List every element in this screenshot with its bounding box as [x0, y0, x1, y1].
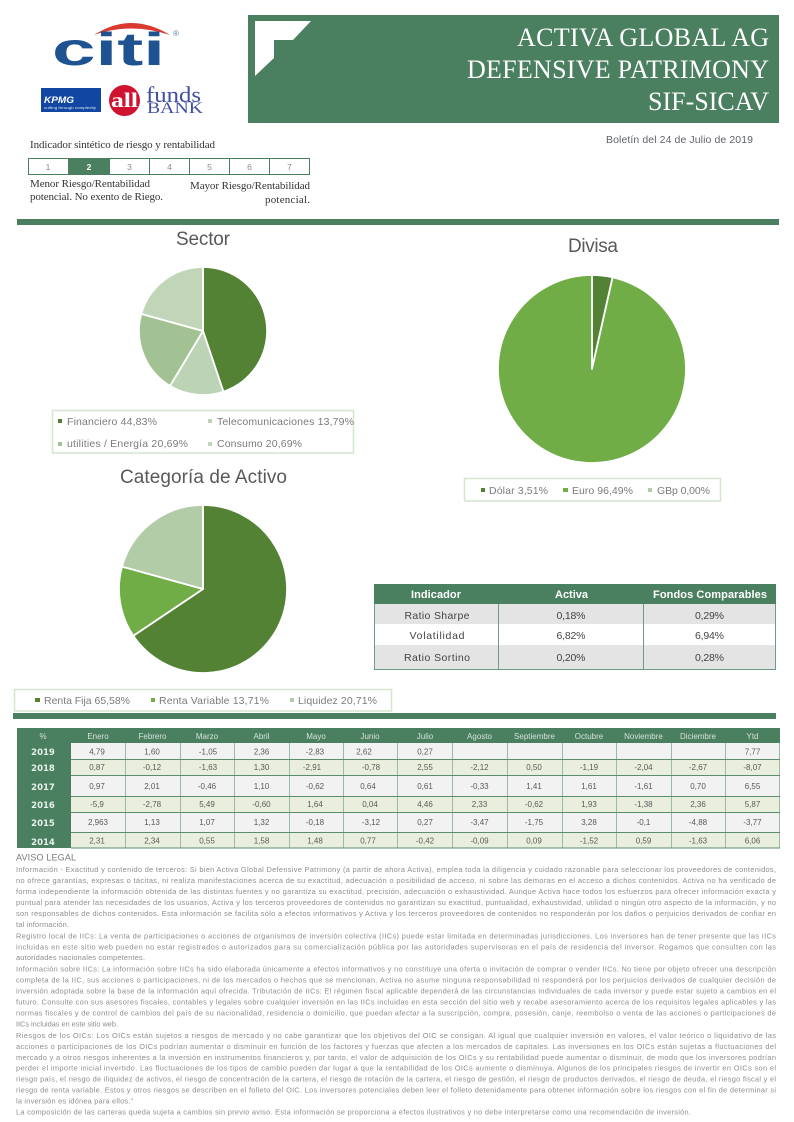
row: volatilidad	[410, 630, 724, 642]
title: DEFENSIVE PATRIMONY	[467, 55, 769, 84]
row 2016: 1,93	[581, 800, 597, 809]
legal text: puntual para atender las necesidades de los usuarios, Activa y los terceros proveedores de contenidos no garantizan su exactitud, puntualidad, exhaustividad, utilidad o ningún otro aspecto de la información, y no	[16, 898, 776, 907]
row 2019: 2,36	[254, 748, 270, 756]
row 2014	[31, 836, 761, 848]
row: ratio sortino	[404, 652, 724, 664]
row 2015: -3,12	[362, 818, 381, 827]
row 2016: -1,38	[634, 800, 653, 809]
legal text: forma independiente la información obtenida de las distintas fuentes y no garantiza su exactitud, precisión, adecuación o exhaustividad. Aunque Activa hace todos los esfuerzos para ofrecer información exacta y	[16, 887, 776, 896]
row 2018: -1,63	[199, 763, 218, 772]
row 2017	[31, 782, 761, 793]
panel: sector chart	[52, 229, 354, 453]
icon: white corner logo	[255, 21, 311, 76]
row 2016: 2,36	[690, 800, 706, 809]
row: volatilidad: 6,94%	[695, 630, 724, 642]
legal text: completa de la IIC, sus acciones o participaciones, ni de los mercados o hechos que se mencionan. Activa no asume ninguna responsabilidad ni responderá por los perjuicios derivados de cualquier decisión de	[16, 976, 776, 984]
row 2015: -0,18	[306, 818, 325, 827]
row 2019: 2,62	[356, 748, 372, 756]
legal text: Registro local de IICs: La venta de participaciones o acciones de organismos de inversión colectiva (IICs) puede estar limitada en determinadas jurisdicciones. Los inversores han de tener presente que las IICs	[16, 932, 776, 940]
risk indicator	[28, 139, 310, 206]
row 2018: 0,87	[89, 763, 105, 772]
sector legend	[52, 410, 354, 453]
table header: Mayo	[306, 732, 326, 741]
divisa legend: GBp 0,00%	[657, 485, 710, 497]
row 2018: 2018	[31, 764, 55, 774]
table header: Diciembre	[680, 732, 717, 741]
row 2014: 1,48	[307, 836, 323, 846]
categoria legend: Liquidez 20,71%	[298, 695, 377, 707]
legal text: acciones o participaciones de los OICs podrían aumentar o disminuir en función de los factores y fuerzas que afecten a los mercados de capitales. Las inversiones en los OICs están sujetas a fluctuaciones del	[16, 1042, 776, 1051]
legal text: normas fiscales y de control de cambios del país de su nacionalidad, residencia o domicilio, que puedan afectar a la suscripción, compra, posesión, canje, reembolso o venta de las acciones o participaciones de	[16, 1008, 776, 1018]
table header: Marzo	[196, 732, 219, 741]
row 2015: 1,13	[144, 818, 160, 827]
row: volatilidad: 6,82%	[556, 630, 586, 642]
sector legend: Consumo 20,69%	[217, 438, 302, 450]
row 2016: 4,46	[417, 800, 433, 809]
risk scale: 3	[127, 162, 132, 172]
row 2015: -1,75	[525, 818, 544, 827]
header banner	[248, 15, 779, 123]
risk scale: 1	[46, 162, 51, 172]
risk scale: 6	[247, 162, 252, 172]
row 2015: 1,07	[199, 818, 215, 827]
divisa heading: Divisa	[568, 236, 618, 257]
row 2019: 7,77	[745, 748, 761, 756]
row 2014: -1,63	[689, 836, 708, 846]
row 2014: 6,06	[745, 836, 761, 846]
table header: %	[39, 732, 47, 741]
row 2018: 2,55	[417, 763, 433, 772]
row 2018: -0,12	[143, 763, 162, 772]
risk high label	[190, 180, 310, 206]
row: ratio sharpe	[404, 610, 724, 622]
row 2016: 2,33	[472, 800, 488, 809]
row 2015: 2015	[31, 819, 55, 829]
legal text: tal información.	[16, 920, 69, 929]
row 2016: 2016	[31, 801, 55, 811]
row 2018: -2,04	[634, 763, 653, 772]
legal text: mercado y a otros riesgos inherentes a la inversión en instrumentos financieros y, por tanto, el valor de adquisición de los OICs y su rentabilidad puede aumentar o disminuir, de modo que los inversores podrían	[16, 1053, 776, 1062]
row 2014: -0,09	[470, 836, 489, 846]
row 2015	[31, 818, 762, 829]
categoria heading: Categoría de Activo	[120, 467, 287, 488]
row 2015: -3,47	[470, 818, 489, 827]
row 2017: 0,61	[417, 782, 433, 791]
risk low label: Menor Riesgo/Rentabilidad	[30, 178, 150, 190]
legal text: Información - Exactitud y contenido de terceros: Si bien Activa Global Defensive Patrimony (a partir de ahora Activa), emplea toda la diligencia y cuidado razonable para seleccionar los proveedores de contenidos,	[16, 865, 776, 874]
row 2016: 5,49	[199, 800, 215, 809]
row 2018: -1,19	[580, 763, 599, 772]
divisa legend: Euro 96,49%	[572, 485, 633, 497]
table header: Septiembre	[514, 732, 556, 741]
row 2017: 0,64	[360, 782, 376, 791]
risk scale: 4	[167, 162, 172, 172]
legal text: la inversión es idónea para ellos.”	[16, 1096, 134, 1106]
panel: divisa chart	[464, 236, 720, 501]
table header: Octubre	[575, 732, 604, 741]
row 2015: 2,963	[88, 818, 109, 827]
legal notice	[16, 852, 776, 1116]
row 2016	[31, 800, 761, 811]
row 2014: -1,52	[580, 836, 599, 846]
table header: Agosto	[467, 732, 493, 741]
row 2016: 0,04	[362, 800, 378, 809]
indicators header	[374, 584, 776, 604]
row 2018: 0,50	[526, 763, 542, 772]
row: ratio sortino: 0,28%	[695, 652, 724, 664]
sector pie	[139, 267, 267, 395]
legal text: riesgo país, el riesgo de iliquidez de activos, el riesgo de concentración de la cartera, el riesgo de rotación de la cartera, el riesgo de gestión, el riesgo de productos derivados, el riesgo de deuda, el riesgo fiscal y el	[16, 1075, 776, 1084]
table header	[17, 728, 780, 743]
row 2019	[31, 748, 761, 758]
row 2015: -3,77	[743, 818, 762, 827]
row 2019: 4,79	[89, 748, 105, 756]
risk high label: potencial.	[265, 194, 310, 206]
risk scale: 5	[207, 162, 212, 172]
logo: allfunds bank: all	[111, 88, 138, 112]
logo: allfunds bank: BANK	[147, 100, 204, 117]
legal text: riesgo de renta variable. Estos y otros riesgos se describen en el folleto del OIC. Los inversores potenciales deben leer el folleto detenidamente para obtener información sobre los riesgos con el fin de determinar si	[16, 1086, 776, 1095]
title	[467, 23, 769, 116]
title: SIF-SICAV	[648, 87, 769, 116]
row 2017: -0,46	[198, 782, 217, 791]
row 2017: 6,55	[745, 782, 761, 791]
risk heading: Indicador sintético de riesgo y rentabilidad	[30, 139, 216, 151]
legal text	[16, 865, 776, 1116]
row 2014: 2,34	[144, 836, 160, 846]
indicators header: Indicador	[411, 589, 462, 601]
row: ratio sharpe: 0,18%	[556, 610, 586, 622]
logo: KPMG: cutting through complexity	[44, 106, 96, 110]
risk scale	[28, 158, 310, 175]
row 2019: -2,83	[306, 748, 325, 756]
row 2018	[31, 763, 762, 774]
logo: KPMG: KPMG	[44, 95, 74, 105]
row 2017: 1,61	[581, 782, 597, 791]
table header: Febrero	[138, 732, 167, 741]
row 2017: 2017	[31, 783, 55, 793]
row 2014: 2,31	[89, 836, 105, 846]
row 2018: -8,07	[743, 763, 762, 772]
row 2017: 2,01	[144, 782, 160, 791]
row: ratio sharpe: Ratio Sharpe	[404, 610, 470, 622]
legal text: inversión adoptada sobre la base de la información aquí ofrecida. Tributación de IICs: El régimen fiscal aplicable dependerá de las circunstancias individuales de cada inversor y puede estar sujeto a cambios en el	[16, 986, 776, 996]
row 2018: -0,78	[362, 763, 381, 772]
row 2015: -4,88	[689, 818, 708, 827]
divisa legend: Dólar 3,51%	[489, 485, 548, 497]
legal text: La composición de las carteras queda sujeta a cambios sin previo aviso. Esta información se proporciona a efectos ilustrativos y no debe interpretarse como una recomendación de inversión.	[16, 1108, 691, 1116]
logo: KPMG	[41, 88, 101, 112]
row 2017: 1,10	[254, 782, 270, 791]
row 2019: 2019	[31, 748, 55, 758]
table header: Ytd	[746, 732, 759, 741]
row 2014: 0,77	[360, 836, 376, 846]
row 2016: -5,9	[90, 800, 104, 809]
row 2019: -1,05	[199, 748, 218, 756]
table header: Abril	[253, 732, 270, 741]
sector legend: utilities / Energía 20,69%	[67, 438, 188, 450]
row 2017: -0,33	[470, 782, 489, 791]
logo: citi	[52, 23, 179, 75]
row 2014: 2014	[31, 838, 55, 848]
categoria legend: Renta Fija 65,58%	[44, 695, 130, 707]
divisa pie	[498, 275, 686, 463]
categoria legend: Renta Variable 13,71%	[159, 695, 269, 707]
legal text: Riesgos de los OICs: Los OICs están sujetos a riesgos de mercado y no cabe garantizar que los objetivos del OIC se consigan. Al igual que cualquier inversión en valores, el valor teórico o liquidativo de las	[16, 1031, 776, 1040]
legal heading: AVISO LEGAL	[16, 852, 76, 862]
legal text: no ofrece garantías, expresas o tácitas, ni realiza manifestaciones acerca de su exactitud, adecuación o posibilidad de acceso, ni sobre las demoras en el acceso a dichos contenidos. Activa no ha verificado de	[16, 876, 776, 885]
logo: citi: ®	[173, 29, 179, 38]
row: volatilidad: Volatilidad	[410, 630, 465, 642]
indicators table	[374, 584, 776, 670]
row 2015: 1,32	[254, 818, 270, 827]
row 2017: 1,41	[526, 782, 542, 791]
row 2016: 5,87	[745, 800, 761, 809]
legal text: incluidas en este sitio web pueden no estar registrados o autorizados para su comercialización pública por las autoridades supervisoras en el país de residencia del inversor. Rogamos que consulten con las	[16, 942, 776, 952]
risk scale: 2	[87, 162, 92, 172]
logo: citi: citi	[52, 23, 165, 75]
row: ratio sortino: Ratio Sortino	[404, 652, 470, 664]
row 2016: 1,64	[307, 800, 323, 809]
logo: allfunds bank: funds	[146, 82, 201, 107]
table header: Enero	[87, 732, 109, 741]
row 2017: 0,97	[89, 782, 105, 791]
table header: Junio	[360, 732, 380, 741]
row 2019: 1,60	[144, 748, 160, 756]
table header: Noviembre	[624, 732, 663, 741]
legal text: futuro. Consulte con sus asesores fiscales, contables y legales sobre cualquier inversión en las IICs incluidas en esta sección del sitio web y recabe asesoramiento acerca de los requisitos legales aplicables y las	[16, 998, 776, 1006]
indicators header: Activa	[555, 589, 589, 601]
panel: categoría de activo chart	[14, 467, 392, 711]
row 2017: -0,62	[306, 782, 325, 791]
row: ratio sortino: 0,20%	[556, 652, 586, 664]
row 2018: -2,12	[470, 763, 489, 772]
title: ACTIVA GLOBAL AG	[517, 23, 769, 52]
row 2015: 0,27	[417, 818, 433, 827]
row 2018: -2,91	[303, 763, 322, 772]
row 2017: 0,70	[690, 782, 706, 791]
row 2014: 0,59	[636, 836, 652, 846]
risk low label: potencial. No exento de Riego.	[30, 191, 163, 203]
indicators header: Fondos Comparables	[653, 589, 767, 601]
row 2014: -0,42	[416, 836, 435, 846]
categoria pie	[119, 505, 287, 673]
row 2014: 1,58	[254, 836, 270, 846]
row 2016: -2,78	[143, 800, 162, 809]
row 2019: 0,27	[417, 748, 433, 756]
row 2018: 1,30	[254, 763, 270, 772]
legal text: perder el importe inicial invertido. Las fluctuaciones de los tipos de cambio pueden dar lugar a que la rentabilidad de los OICs aumente o disminuya. Algunos de los principales riesgos de invertir en OICs son el	[16, 1064, 776, 1073]
sector heading: Sector	[176, 229, 231, 250]
monthly returns table	[17, 728, 780, 848]
divisa legend	[464, 478, 720, 501]
row 2017: -1,61	[634, 782, 653, 791]
legal text: son responsables de dichos contenidos. Esta información se facilita sólo a efectos informativos y Activa y los terceros proveedores de contenidos no responderán por los daños o perjuicios derivados de confiar en	[16, 909, 776, 918]
legal text: Información sobre IICs: La información sobre IICs ha sido elaborada únicamente a efectos informativos y no constituye una oferta o invitación de comprar o vender IICs. No tiene por objeto ofrecer una descripción	[16, 964, 776, 974]
row 2016: -0,62	[525, 800, 544, 809]
row: ratio sharpe: 0,29%	[695, 610, 724, 622]
row 2018: -2,67	[689, 763, 708, 772]
row 2015: 3,28	[581, 818, 597, 827]
row 2015: -0,1	[637, 818, 651, 827]
categoria legend	[14, 690, 392, 711]
row 2014: 0,55	[199, 836, 215, 846]
legal text: IICs incluidas en este sitio web.	[16, 1020, 118, 1028]
sector legend: Financiero 44,83%	[67, 416, 157, 428]
table header: Julio	[417, 732, 434, 741]
bulletin date: Boletín del 24 de Julio de 2019	[606, 134, 753, 146]
logo: allfunds bank	[109, 82, 204, 117]
risk high label: Mayor Riesgo/Rentabilidad	[190, 180, 310, 192]
row 2016: -0,60	[252, 800, 271, 809]
risk scale: 7	[287, 162, 292, 172]
sector legend: Telecomunicaciones 13,79%	[217, 416, 354, 428]
row 2014: 0,09	[526, 836, 542, 846]
risk low label	[30, 178, 163, 203]
legal text: autoridades nacionales competentes.	[16, 953, 145, 962]
